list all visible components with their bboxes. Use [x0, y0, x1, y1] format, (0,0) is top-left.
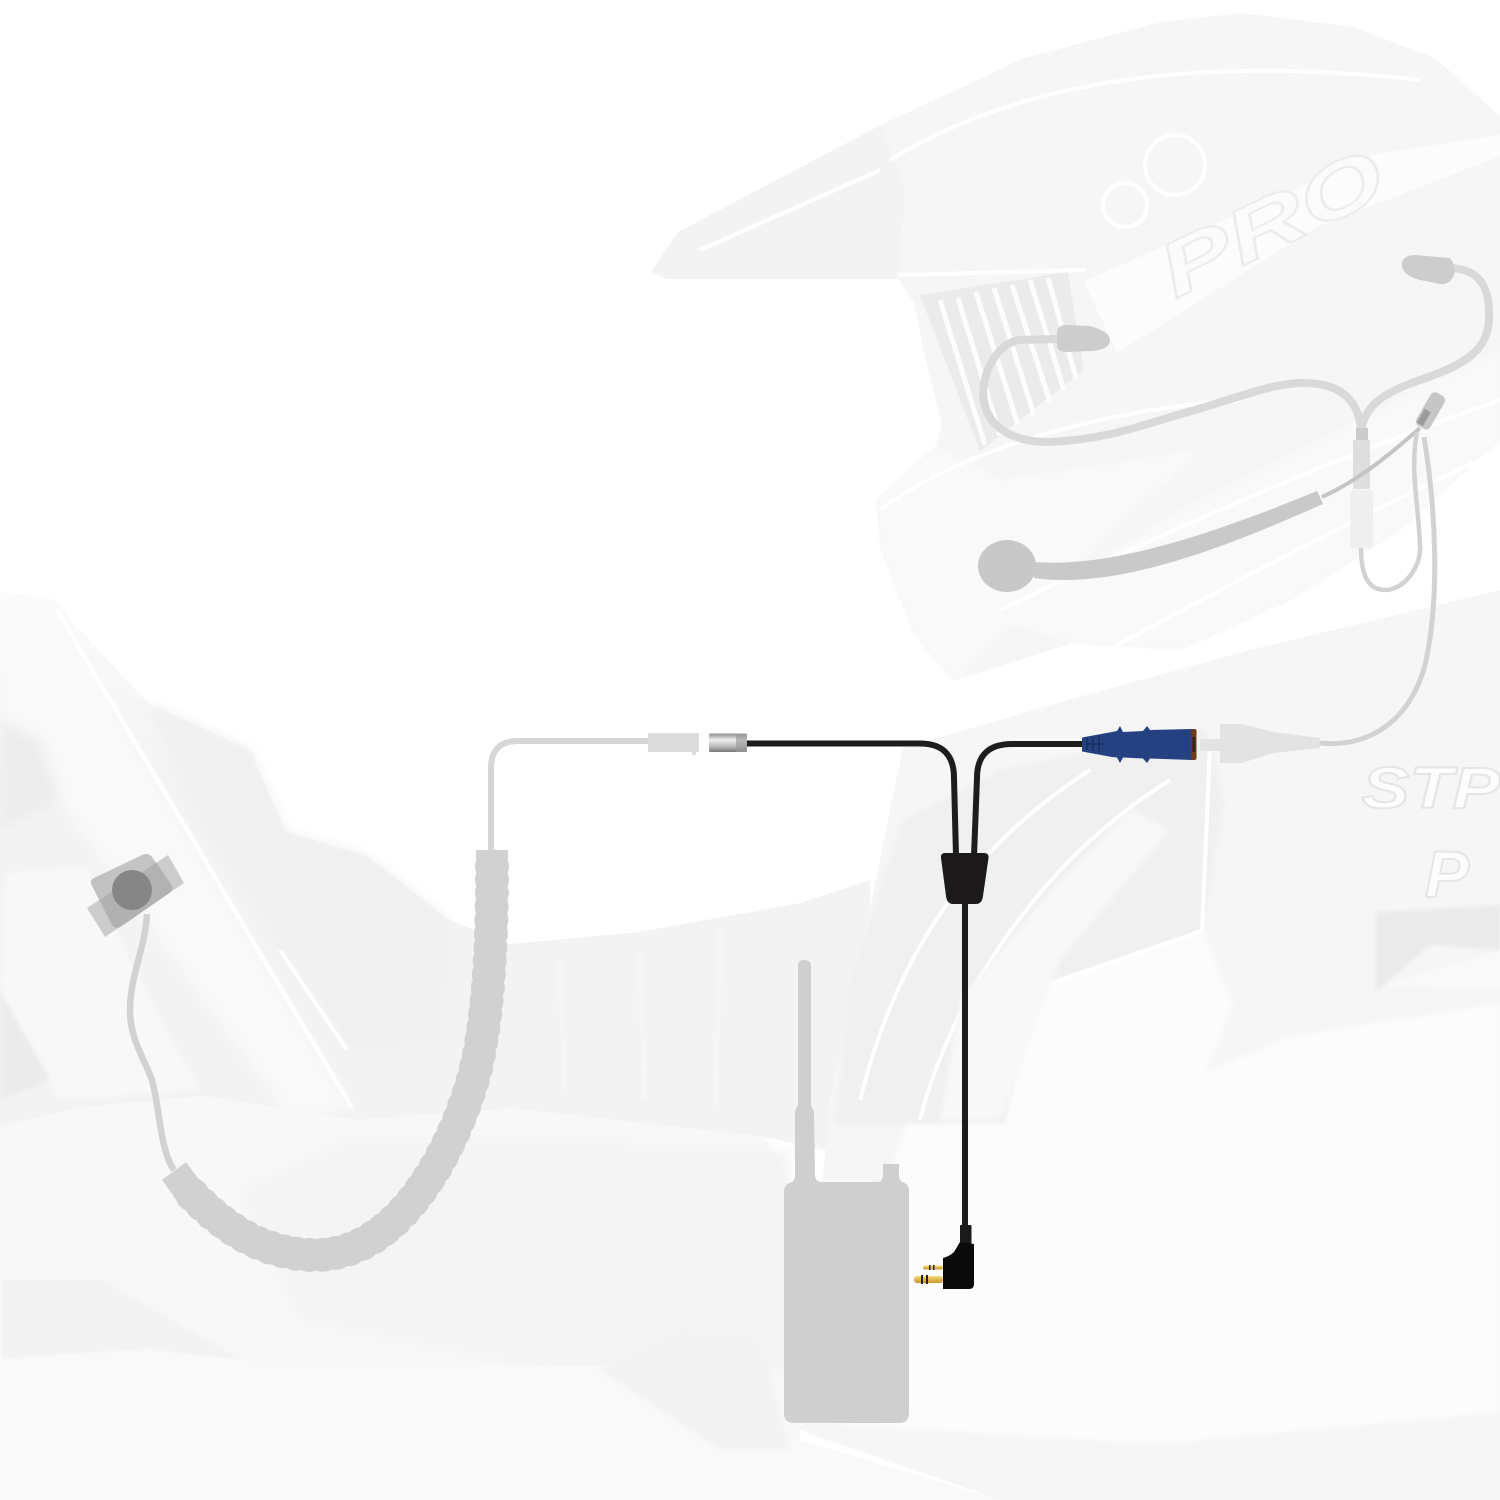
- goggle stripes: [940, 278, 1076, 445]
- ghost cable to connector: [491, 741, 650, 850]
- helmet: [651, 13, 1500, 681]
- blue connector: [1082, 726, 1196, 763]
- helmet logo: PRO: [1145, 133, 1398, 314]
- driver suit: [800, 590, 1500, 1500]
- suit logo: STP: [1362, 756, 1500, 821]
- radio silhouette: [784, 960, 909, 1423]
- ghost coiled cable: [174, 860, 508, 1255]
- radio plug: [914, 1225, 974, 1289]
- Y splitter: [941, 853, 989, 904]
- lap and lower sleeve: [0, 1096, 1000, 1500]
- inline plug: [1353, 440, 1370, 489]
- boom microphone: [1322, 428, 1420, 497]
- loop wires: [1361, 432, 1420, 590]
- suit logo: [1362, 756, 1500, 911]
- metal connector: [709, 734, 747, 752]
- steering wheel, glove and sleeve: [0, 592, 870, 1160]
- ghost steering wheel button: [87, 854, 184, 937]
- ghost thin cord: [130, 914, 174, 1170]
- earpieces: [1057, 325, 1110, 352]
- boom end: [1414, 390, 1447, 431]
- ghost connector right: [1200, 724, 1320, 763]
- suit logo: P: [1425, 837, 1470, 911]
- earpiece wires: [983, 268, 1489, 442]
- black Y cable: [747, 744, 1082, 1226]
- ghost connector left: [648, 733, 699, 755]
- ghost headset: [978, 255, 1489, 744]
